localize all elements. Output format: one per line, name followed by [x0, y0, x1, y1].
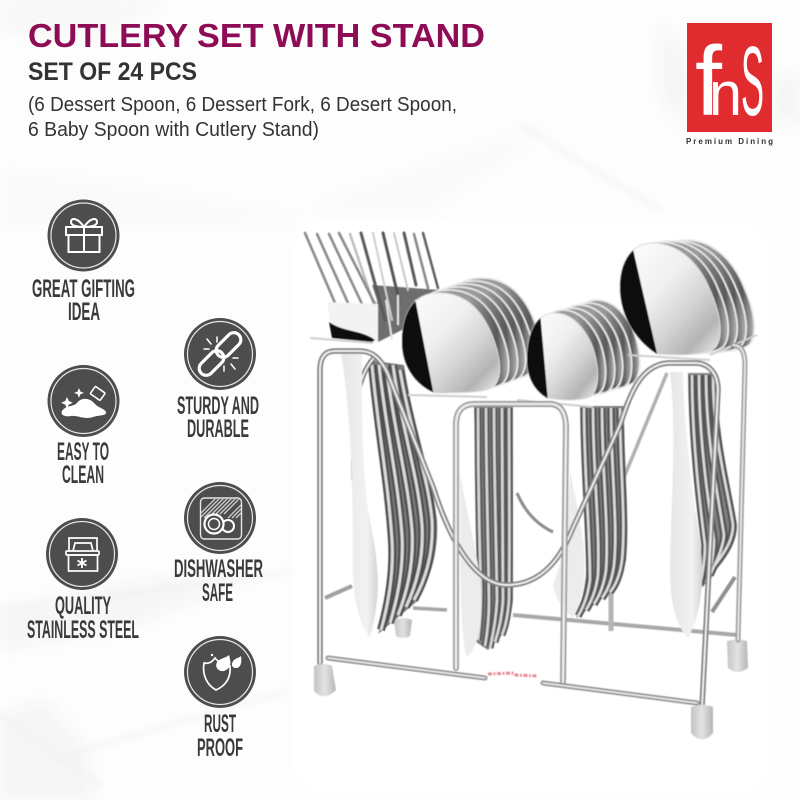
description — [28, 94, 457, 141]
feature: great gifting idea — [32, 200, 135, 326]
feature: dishwasher safe: DISHWASHER — [174, 555, 263, 583]
title: CUTLERY SET WITH STAND — [28, 17, 485, 54]
feature: dishwasher safe — [174, 482, 263, 607]
fork stack: rear forks — [350, 233, 439, 342]
feature: sturdy and durable — [177, 318, 259, 443]
logo: n — [709, 60, 742, 129]
handles: spoon stack 3 — [670, 372, 737, 638]
logo: Premium Dining — [686, 137, 773, 146]
product backdrop panel — [292, 221, 770, 793]
stand: shelf plates — [310, 335, 757, 407]
stand: rear rails and feet — [325, 373, 748, 672]
feature: easy to clean: CLEAN — [62, 461, 104, 489]
stand: front feet — [314, 664, 713, 740]
handles: spoon stack 2 — [553, 406, 627, 618]
feature: easy to clean: EASY TO — [57, 438, 109, 466]
feature: sturdy and durable: STURDY AND — [177, 392, 259, 420]
subtitle: SET OF 24 PCS — [28, 58, 197, 86]
feature: rust proof: RUST — [204, 710, 236, 738]
description: (6 Dessert Spoon, 6 Dessert Fork, 6 Desert Spoon, — [28, 94, 457, 116]
stand: wire frame — [320, 345, 745, 707]
icon: broken chain — [184, 318, 256, 390]
handles: spoon stack 1 — [460, 406, 513, 657]
feature: great gifting idea: GREAT GIFTING — [32, 275, 135, 303]
feature: rust proof — [184, 636, 256, 762]
logo — [686, 23, 773, 146]
spoon bowls: stack 3 — [612, 240, 754, 358]
icon: spill and sparkles — [48, 365, 120, 437]
feature: easy to clean — [48, 365, 120, 489]
icon: dishwasher — [184, 482, 256, 554]
icon: storage box — [46, 518, 118, 590]
text: STAINLESS STEEL — [27, 616, 139, 644]
fork: front fork — [305, 233, 378, 343]
icon: gift — [48, 200, 120, 272]
product: cutlery set on stand — [305, 233, 757, 740]
logo: f — [695, 26, 723, 136]
sticker mark — [488, 673, 537, 676]
feature: great gifting idea: IDEA — [68, 298, 100, 326]
feature: quality stainless steel — [27, 518, 139, 644]
spoon bowls: stack 2 — [520, 300, 640, 402]
icon: shield and drops — [184, 636, 256, 708]
spoon bowls: stack 1 — [395, 278, 542, 396]
handles: fork stack — [341, 353, 437, 637]
feature: dishwasher safe: SAFE — [202, 579, 233, 607]
feature: quality stainless steel: QUALITY — [55, 592, 111, 620]
feature: sturdy and durable: DURABLE — [187, 415, 249, 443]
description: 6 Baby Spoon with Cutlery Stand) — [28, 119, 319, 141]
feature: rust proof: PROOF — [197, 734, 243, 762]
